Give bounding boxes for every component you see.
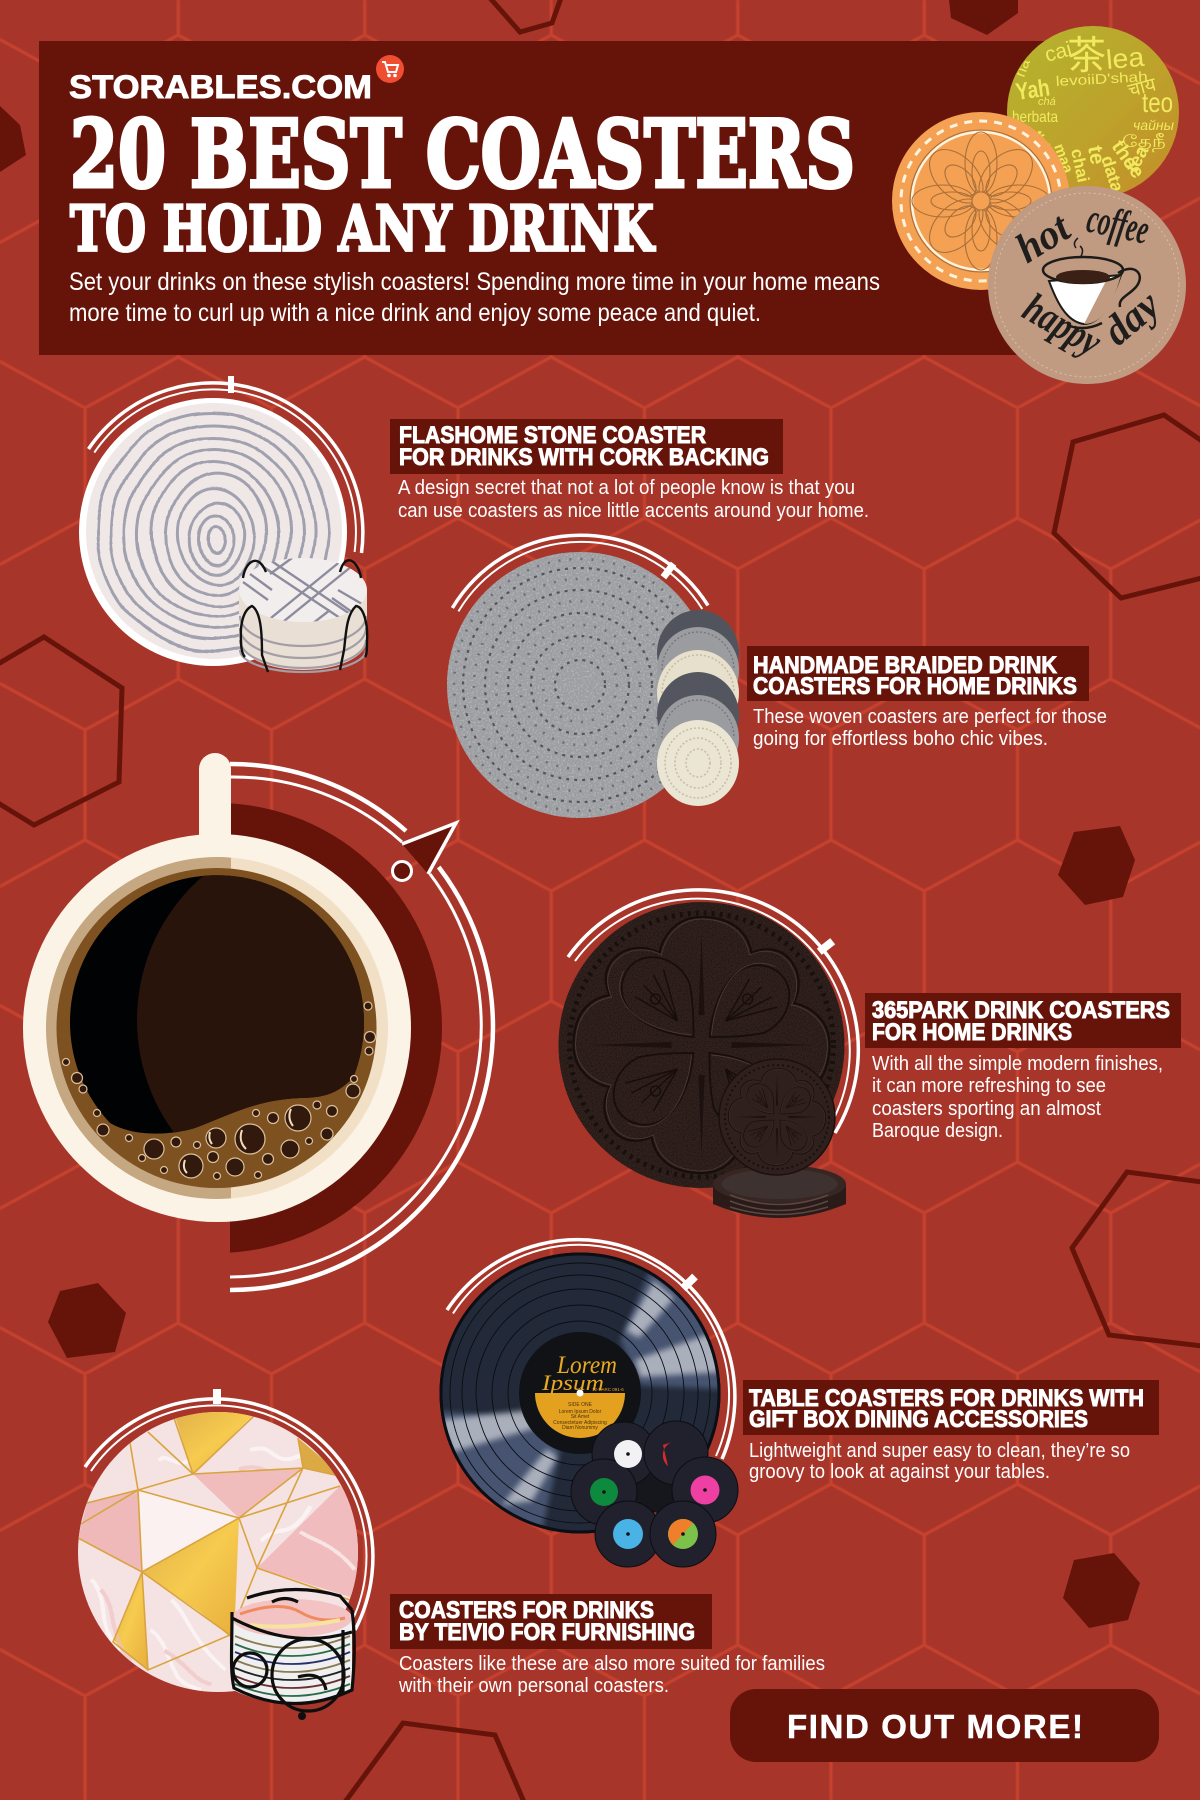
intro text xyxy=(69,268,880,327)
label: 365Park heading xyxy=(865,993,1181,1048)
coaster: hot coffee happy day: hot xyxy=(1008,204,1079,272)
coaster: yellow tea words: चाय xyxy=(1126,74,1159,102)
coaster: yellow tea words: cai xyxy=(1042,38,1074,67)
coaster: yellow tea words: tea xyxy=(1122,142,1154,176)
item 2: handmade braided coasters xyxy=(447,535,1107,818)
label: Teivio heading: BY TEIVIO FOR FURNISHING xyxy=(399,1619,695,1646)
title line 2: TO HOLD ANY DRINK xyxy=(70,192,656,266)
label: Flashome heading: FOR DRINKS WITH CORK BACKING xyxy=(399,444,769,471)
icon: ring arcs xyxy=(568,890,858,1133)
coaster: large vinyl record: Consectetuer Adipiscing xyxy=(553,1420,607,1426)
coaster: yellow tea words: levoiiD'shah xyxy=(1055,68,1148,89)
label: Teivio heading xyxy=(390,1594,712,1649)
title line 1: 20 BEST COASTERS xyxy=(70,100,855,208)
text: 365Park description: Baroque design. xyxy=(872,1119,1003,1142)
text: table coasters description xyxy=(749,1439,1130,1483)
label: table coasters heading: GIFT BOX DINING ACCESSORIES xyxy=(749,1406,1088,1433)
coaster: yellow tea words: te xyxy=(1083,144,1109,166)
label: 365Park heading: 365PARK DRINK COASTERS xyxy=(872,997,1170,1024)
coaster: yellow tea words: чайны xyxy=(1133,117,1175,133)
item 1: Flashome stone coaster xyxy=(79,376,869,672)
label: table coasters heading: TABLE COASTERS FOR DRINKS WITH xyxy=(749,1385,1144,1412)
text: table coasters description: Lightweight and super easy to clean, they’re so xyxy=(749,1439,1130,1462)
coaster: yellow tea words: chá xyxy=(1038,96,1056,108)
text: 365Park description: it can more refreshing to see xyxy=(872,1074,1106,1097)
cup body xyxy=(23,834,411,1222)
coaster: large vinyl record: Sit Amet xyxy=(571,1414,590,1420)
coaster: yellow tea words: chai xyxy=(1067,147,1093,184)
central coffee cup illustration xyxy=(0,753,517,1290)
coaster: large vinyl record xyxy=(430,1253,735,1540)
coaster: yellow tea words: data xyxy=(1097,153,1128,195)
coaster: hot coffee happy day: happy xyxy=(1015,285,1109,366)
label: Flashome heading xyxy=(390,419,783,474)
text: table coasters description: groovy to look at against your tables. xyxy=(749,1460,1050,1483)
coaster: hot coffee happy day: day xyxy=(1095,282,1169,355)
coaster: yellow tea words: herbata xyxy=(1012,109,1058,126)
label: braided heading xyxy=(747,646,1089,701)
text: Teivio description: Coasters like these are also more suited for families xyxy=(399,1652,825,1675)
text: Flashome description xyxy=(398,476,869,522)
coaster: large vinyl record: Diam Nonummy xyxy=(562,1425,598,1431)
coaster: large vinyl record: Lorem Ipsum Dolor xyxy=(559,1409,602,1415)
dark backing half circle xyxy=(230,803,442,1253)
label: 365Park heading: FOR HOME DRINKS xyxy=(872,1019,1072,1046)
text: braided description xyxy=(753,705,1107,750)
coaster: large vinyl record: Ipsum xyxy=(541,1370,604,1395)
coaster: pink and gold marble xyxy=(78,1410,360,1692)
coaster: yellow tea words: lea xyxy=(1105,42,1146,75)
coaster: yellow tea words: teo xyxy=(1142,87,1173,118)
coaster: yellow tea words xyxy=(1007,25,1179,198)
intro text: Set your drinks on these stylish coasters! Spending more time in your home means xyxy=(69,268,880,296)
coaster: large vinyl record: SIDE ONE xyxy=(568,1402,593,1408)
label: Flashome heading: FLASHOME STONE COASTER xyxy=(399,422,706,449)
icon: ring arcs xyxy=(452,535,708,611)
mini vinyl coasters xyxy=(571,1421,738,1567)
item 5: Teivio marble coasters xyxy=(78,1389,825,1720)
brand name: STORABLES.COM xyxy=(69,69,372,105)
text: Teivio description: with their own personal coasters. xyxy=(398,1674,669,1697)
coaster: yellow tea words: 茶 xyxy=(1067,25,1106,81)
label: table coasters heading xyxy=(743,1380,1159,1435)
arrow head xyxy=(392,823,456,880)
item 3: 365Park drink coasters xyxy=(558,890,1181,1218)
coffee surface xyxy=(70,875,364,1134)
label: Teivio heading: COASTERS FOR DRINKS xyxy=(399,1597,654,1624)
icon: ring arcs xyxy=(447,1240,735,1459)
header panel xyxy=(39,41,1045,355)
text: 365Park description: With all the simple modern finishes, xyxy=(872,1052,1163,1075)
cup inner wall xyxy=(46,857,388,1199)
text: Flashome description: can use coasters as nice little accents around your home. xyxy=(398,499,869,522)
call to action button xyxy=(730,1689,1159,1762)
coaster: hot coffee happy day: coffee xyxy=(1083,196,1153,254)
coaster: embossed dark leather xyxy=(558,902,844,1188)
coaster: large vinyl record: 12-EARC 091-6 xyxy=(592,1387,624,1392)
coaster: yellow tea words: தேநீ xyxy=(1122,132,1166,151)
text: braided description: going for effortless boho chic vibes. xyxy=(753,727,1048,750)
coaster: yellow tea words: thee xyxy=(1107,136,1149,183)
icon: ring arcs xyxy=(85,1389,373,1630)
coaster: orange floral xyxy=(892,112,1070,290)
coaster: large vinyl record: Lorem xyxy=(556,1352,617,1379)
coaster: yellow tea words: ha xyxy=(1012,57,1034,79)
coaster: yellow tea words: thé xyxy=(1030,128,1053,152)
call to action button: FIND OUT MORE! xyxy=(787,1708,1083,1745)
intro text: more time to curl up with a nice drink and enjoy some peace and quiet. xyxy=(69,299,761,327)
coffee bubbles xyxy=(62,1002,376,1180)
text: 365Park description xyxy=(872,1052,1163,1142)
text: Flashome description: A design secret that not a lot of people know is that you xyxy=(398,476,855,499)
text: braided description: These woven coasters are perfect for those xyxy=(753,705,1107,728)
label: braided heading: COASTERS FOR HOME DRINKS xyxy=(753,673,1077,700)
icon: ring arcs xyxy=(88,376,363,553)
coaster: hot coffee happy day xyxy=(988,186,1186,384)
coaster stack with wire holder xyxy=(239,558,367,672)
coaster holder and small coaster xyxy=(713,1059,846,1218)
icon: shopping cart badge xyxy=(376,55,404,83)
coaster: grey braided xyxy=(447,552,713,818)
item 4: vinyl record table coasters xyxy=(430,1240,1159,1567)
cup handle xyxy=(199,753,231,850)
coaster: yellow tea words: Yah xyxy=(1014,74,1052,106)
coaster stack in wire holder xyxy=(232,1589,354,1720)
coaster stack: six woven rounds xyxy=(657,610,739,806)
text: 365Park description: coasters sporting an almost xyxy=(872,1097,1101,1120)
coaster: yellow tea words: maa xyxy=(1050,142,1077,176)
text: Teivio description xyxy=(398,1652,825,1697)
arrow ring arcs xyxy=(230,764,493,1290)
label: braided heading: HANDMADE BRAIDED DRINK xyxy=(753,652,1058,679)
coaster: stone rings xyxy=(79,398,347,666)
